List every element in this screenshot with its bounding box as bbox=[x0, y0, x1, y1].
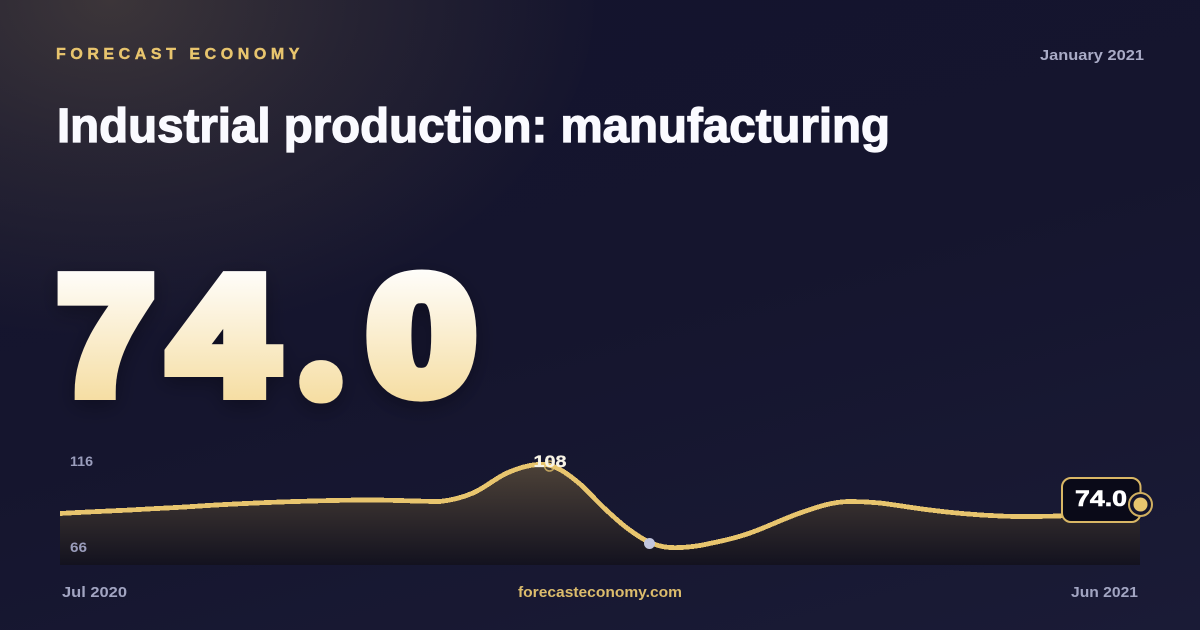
big value: . bbox=[319, 370, 323, 387]
x axis end: Jun 2021 bbox=[1071, 584, 1138, 601]
low marker bbox=[644, 538, 655, 549]
y axis max: 116 bbox=[70, 454, 94, 469]
date label: January 2021 bbox=[1040, 47, 1144, 64]
value callout: 74.0 bbox=[1075, 486, 1127, 511]
end marker bbox=[1129, 493, 1152, 516]
peak label: 108 bbox=[534, 452, 566, 471]
peak marker bbox=[544, 461, 554, 471]
big value: 0 bbox=[368, 243, 475, 427]
big value bbox=[59, 243, 475, 427]
sparkline chart bbox=[60, 452, 1152, 565]
line bbox=[60, 464, 1140, 548]
big value: 4 bbox=[171, 244, 275, 427]
source url: forecasteconomy.com bbox=[518, 584, 682, 601]
eyebrow label: FORECAST ECONOMY bbox=[56, 46, 304, 63]
big value: 7 bbox=[59, 245, 153, 427]
x axis start: Jul 2020 bbox=[62, 584, 127, 601]
area under line bbox=[60, 464, 1140, 565]
title: Industrial production: manufacturing bbox=[57, 100, 890, 153]
value callout bbox=[1062, 478, 1140, 522]
y axis min: 66 bbox=[70, 540, 88, 555]
